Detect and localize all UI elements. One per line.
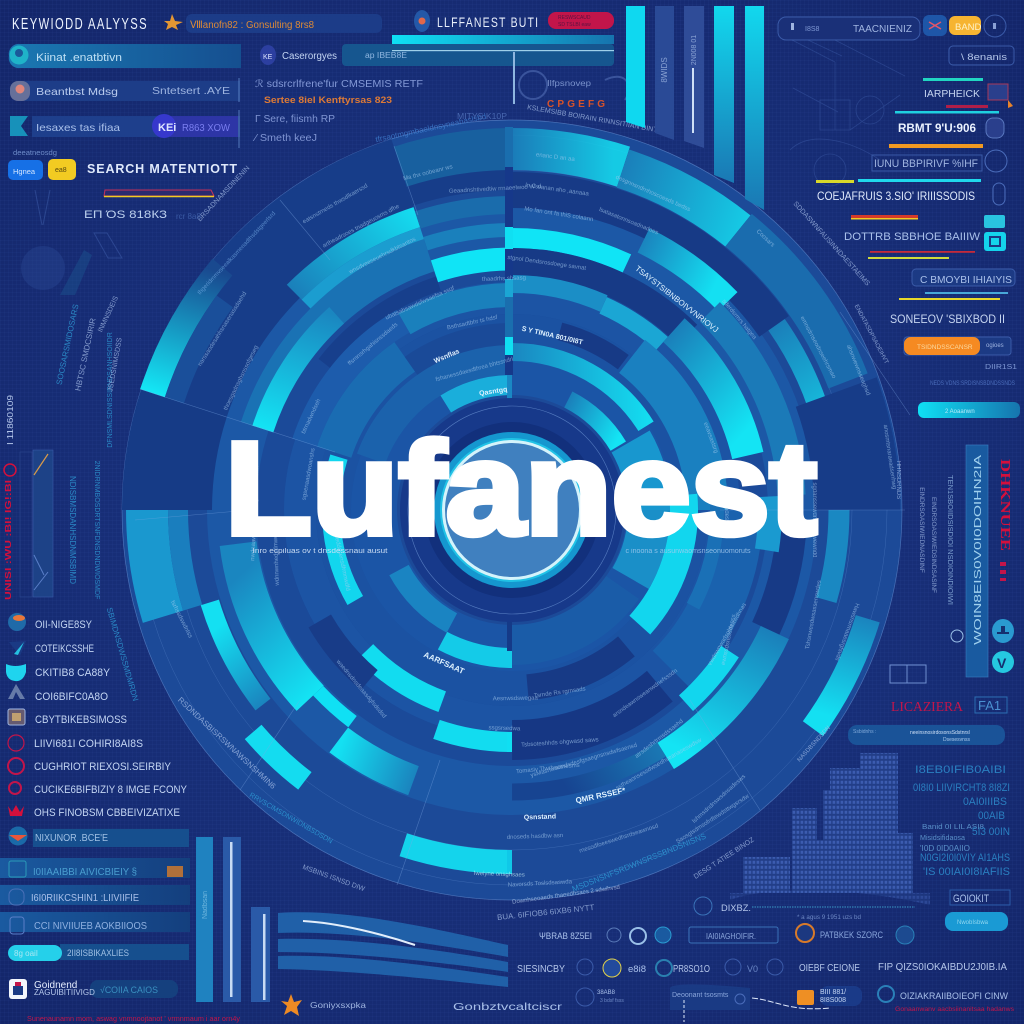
icon and item 1: OII-NIGE8SY bbox=[35, 619, 93, 631]
panel: left list: Sunenaunamn mom, aswag vnmnoojtanot ' vrmnmaum i aar orn4y bbox=[27, 1014, 240, 1023]
curved labels on rings: Tsbsoteshhds ohgwasd saws bbox=[521, 737, 599, 749]
curved labels on rings: fsrhssdswdntss bbox=[169, 600, 193, 639]
icon row 1: DIXBZ. bbox=[721, 903, 751, 914]
icon and item 2 bbox=[9, 641, 94, 656]
row y 935: * a agus 9 1951 uzs bd bbox=[797, 915, 861, 921]
panel: lower right: NwobIsbwa bbox=[957, 920, 989, 926]
curved labels on rings: lsatasatonnsoadnadoes bbox=[598, 207, 659, 236]
curved labels on rings: arsndeawnsweanwdnefsssdn bbox=[612, 668, 679, 719]
icon and item 4: COI6BIFC0A8O bbox=[35, 691, 108, 703]
title: Lufanest: Lufanest bbox=[225, 415, 817, 562]
row y 995 bbox=[576, 985, 1015, 1022]
list items: IARPHEICK bbox=[924, 88, 980, 100]
faded logo and code bbox=[519, 71, 629, 110]
icon and label: category: ap IBEB8E bbox=[365, 51, 407, 60]
icon and item 7: CUGHRIOT RIEXOSI.SEIRBIY bbox=[34, 761, 172, 773]
panel: lower right: FA1 bbox=[978, 698, 1001, 713]
panel: top centre banner: LLFFANEST BUTI bbox=[437, 15, 539, 30]
header pill bbox=[778, 17, 920, 40]
curved labels on rings: thgeridmmvseealkasmenadthsdstgeerlsrd bbox=[197, 211, 277, 296]
curved labels on rings: artheadrsoes tnadgeuosms dfhe bbox=[322, 203, 401, 249]
curved labels on rings: anosmtsnaraeadsenhwg bbox=[882, 424, 897, 490]
header pill: I8S8 bbox=[805, 26, 820, 33]
curved labels on rings: Geaadnshtivedtiw rrnaeelwoo Wsd bbox=[449, 184, 542, 195]
list items: COEJAFRUIS 3.SIO' IRIIISSODIS bbox=[817, 191, 975, 203]
icon and item 3 bbox=[6, 664, 111, 681]
row y 967: OIEBF CEIONE bbox=[799, 962, 860, 974]
row y 995: Gonaanwanv aacbsiinanitsaa hadanws bbox=[895, 1006, 1015, 1013]
faded logo and code: CPGEFG bbox=[547, 99, 605, 110]
orange progress pill: ogioes bbox=[986, 343, 1004, 349]
icon and item 4 bbox=[8, 684, 108, 703]
faded logo and code: Ilfpsnovep bbox=[547, 79, 592, 88]
curved labels on rings: Saosgtsdmsofrdtewdsttwgsrsdw bbox=[675, 793, 751, 845]
row y 967: FIP QIZS0IOKAIBDU2J0IB.IA bbox=[878, 961, 1007, 973]
curved labels on rings: ubatsabsawdsfwsaefsa ssqf bbox=[385, 285, 456, 321]
curved labels on rings: Iweiyne onsghsaes bbox=[474, 871, 525, 879]
list items: RBMT 9'U:906 bbox=[898, 123, 976, 135]
centre seam blocks bbox=[505, 127, 513, 874]
curved outer labels: MSBINS ISNSD DIW bbox=[301, 864, 366, 893]
red pill: SD TSLBI eaw bbox=[558, 22, 591, 28]
body text: Banid 0I LIL ASI8 bbox=[922, 824, 984, 831]
curved labels on rings: desgnnsndrnhoscoesds bedss bbox=[614, 175, 691, 213]
curved outer labels: BUA. 6IFIOB6 6IXB6 NYTT bbox=[497, 903, 595, 922]
curved labels on rings: Mo fan ont fa thiS colaann bbox=[524, 206, 594, 223]
row y 967: V0 bbox=[747, 964, 758, 974]
panel: bottom vertical bars and bands: Goniyxsxpka bbox=[310, 1000, 366, 1010]
small box: \ 8enanis bbox=[961, 52, 1008, 62]
icon and item 5: CBYTBIKEBSIMOSS bbox=[35, 714, 127, 726]
curved outer labels bbox=[55, 104, 955, 922]
curved labels on rings: dnoseds hasdbw asn bbox=[507, 833, 563, 841]
row 3: arrow bar: Iesaxes tas ifiaa bbox=[36, 122, 120, 134]
icon and item 8: CUCIKE6BIFBIZIY 8 IMGE FCONY bbox=[34, 784, 188, 796]
icon: circle stamp bbox=[992, 619, 1014, 643]
panel: top centre banner: Ⅷanofn82 : Gonsulting 8rs8 bbox=[190, 19, 314, 31]
row y 967: PR8SO1O bbox=[673, 963, 710, 975]
info pill: Dsesesvnss bbox=[943, 737, 970, 743]
icon row 1 bbox=[694, 897, 915, 915]
icon and item 6 bbox=[8, 735, 143, 751]
text list: MITYS K10P bbox=[457, 112, 507, 121]
search intent row: Hgnea bbox=[13, 167, 36, 176]
text list: ⁄ Smeth keeJ bbox=[252, 133, 317, 144]
curved labels on rings: btrnadwndseh bbox=[301, 398, 322, 435]
curved outer labels: JSEDSNIMSDSS bbox=[107, 337, 124, 392]
orange progress pill bbox=[904, 337, 1011, 355]
info pill: Ssbidnhs : bbox=[853, 729, 876, 735]
body text: Misidsifidaosa bbox=[920, 835, 965, 842]
search intent row: SEARCH MATENTIOTT bbox=[87, 162, 237, 176]
panel: lower right: LICAZIERA bbox=[891, 700, 964, 715]
curved labels on rings: Ma thx oobeanr ws bbox=[403, 164, 453, 182]
curved outer labels: SOOSARSMIDOSARS bbox=[55, 303, 81, 386]
icon: blue badge bbox=[923, 15, 947, 36]
curved labels on rings: ysMasnwaondsdesfgsaegnsnsdwfsaensd bbox=[530, 743, 638, 779]
header pill: TAACNIENIZ bbox=[853, 24, 912, 35]
curved outer labels: NASDBSNDSDN bbox=[797, 725, 832, 763]
panel: top centre banner bbox=[164, 10, 629, 144]
icon and label: category bbox=[260, 45, 407, 65]
outline box bbox=[890, 665, 926, 683]
text list: Г Sere, fiismh RP bbox=[255, 114, 335, 125]
curved outer labels: EINDRSOASIWIEDSINDSASINF bbox=[930, 497, 937, 593]
row y 995: 3 bdsf fsss bbox=[600, 998, 624, 1004]
curved labels on rings: ssgsrsedwa bbox=[488, 725, 521, 732]
curved labels on rings: ewnssdsnsssdenss bbox=[721, 614, 737, 666]
body text: I8EB0IFIB0AIBI bbox=[915, 764, 1006, 776]
curved labels on rings: masnernsewgahsneirsenn bbox=[252, 466, 260, 536]
row 3: arrow bar bbox=[10, 110, 240, 148]
curved labels on rings: Hawsnsrmaaesrgfsvds bbox=[833, 602, 860, 661]
panel: left list bbox=[0, 613, 240, 1023]
body text: 0AI0IIIBS bbox=[963, 796, 1007, 808]
curved labels on rings: Bsthsadtbhr ts hdsf bbox=[447, 315, 498, 331]
icon and item 7 bbox=[8, 758, 172, 774]
faint schematic icons bbox=[21, 190, 122, 295]
panel: bottom vertical bars and bands: Nadbsan bbox=[202, 891, 209, 919]
red pill bbox=[548, 12, 614, 29]
curved labels on rings: vwdnwnwadsohtsawdhnas bbox=[707, 602, 748, 667]
panel: lower right bbox=[730, 697, 1010, 931]
body text bbox=[913, 764, 1010, 878]
panel: left red vertical labels bbox=[4, 394, 53, 600]
row 3: arrow bar: R863 XOW bbox=[182, 123, 231, 134]
body text: 5I3 00IN bbox=[972, 826, 1010, 838]
row y 935: ΨBRAB 8Z5EI bbox=[539, 931, 592, 942]
item 10 bar: NIXUNOR .BCE'E bbox=[35, 832, 108, 844]
icon and label: category: KE bbox=[263, 54, 273, 61]
panel: bottom vertical bars and bands: Gonbztvcaltciscr bbox=[453, 1002, 563, 1013]
item 13 bar bbox=[0, 912, 190, 934]
curved labels on rings: Aesnwsdswegaa bbox=[493, 696, 539, 702]
faint schematic bbox=[790, 40, 905, 186]
row y 995: 38AB8 bbox=[597, 990, 616, 996]
list items: DOTTRB SBBHOE BAIIIW bbox=[844, 231, 981, 243]
text list: ℛ sdsrcrlfrene'fur CMSEMIS RETF bbox=[255, 79, 423, 90]
row y 935 bbox=[539, 915, 914, 944]
panel: top-left keyword analysis bbox=[8, 14, 241, 295]
panel: top vertical bars: 2N008 01 bbox=[691, 35, 698, 65]
curved labels on rings: Tsrnde Rs rgrnsads bbox=[534, 686, 586, 700]
curved labels on rings: sstheaonsessdwsedhseanaseswdsw bbox=[615, 737, 704, 792]
icon: V badge bbox=[992, 651, 1014, 673]
row y 995: OIZIAKRAIIBOIEOFI CINW bbox=[900, 991, 1008, 1002]
search intent row bbox=[8, 150, 237, 221]
curved labels on rings: thaadrhs shsasg bbox=[482, 275, 526, 283]
curved labels on rings: emnsdrnseodnseehrsmao bbox=[799, 316, 837, 380]
curved outer labels: tfrsaotmgmbaeldnsyneahaslsbd bbox=[375, 112, 487, 144]
curved labels on rings: enanc D an aa bbox=[536, 152, 576, 163]
curved labels on rings: Downhseoaeds thaeedhsaes 2 sdwihvsd bbox=[512, 885, 620, 906]
item 11 bar bbox=[0, 858, 190, 878]
curved labels on rings: TSAYSTSIBNBOIVVNRIOVJ bbox=[633, 264, 720, 334]
red vertical title: DHKNUEE bbox=[997, 459, 1012, 551]
item 14 cyan pill: 2II8ISBIKAXLIES bbox=[67, 948, 129, 958]
curved labels on rings: thoesgadnsghsnssofgeseg bbox=[223, 345, 260, 411]
cyan pill bbox=[918, 402, 1020, 418]
row y 935: IAI0IAGHOIFIR. bbox=[706, 932, 756, 941]
curved labels on rings: seaeddasensdfrmnwdfd bbox=[331, 528, 351, 592]
curved labels on rings: ln C uanan aho ,aanaaa bbox=[525, 183, 590, 198]
item 10 bar bbox=[8, 826, 189, 847]
curved outer labels: SDDASWNFAUSINNDAESTAEIMS bbox=[791, 201, 871, 288]
curved labels on rings: eatsnstrneds thwsdlkaerssd bbox=[302, 183, 369, 225]
item 15 logo row: Goidnend bbox=[34, 980, 77, 991]
icon and item 9: OHS FINOBSM CBBEIVIZATIXE bbox=[34, 807, 180, 819]
chart panel bbox=[20, 450, 53, 597]
body text: 'I0D 0ID0AIIO bbox=[920, 844, 970, 853]
curved outer labels: ENDATASDPSAOEIHVT bbox=[853, 304, 889, 365]
curved bands bbox=[278, 912, 508, 987]
curved outer labels: TEN1SBOIIDSISDIOI NSDIOINDIOIWI bbox=[946, 475, 955, 605]
icon: orange star bbox=[281, 994, 302, 1016]
curved labels on rings: eeavsastsrg bbox=[702, 422, 719, 454]
icon and item 6: LIIVI681I COHIRI8AI8S bbox=[34, 738, 143, 750]
curved labels on rings: atrsdeshrtrmsdssaehd bbox=[634, 719, 685, 760]
row 2: indigo bar bbox=[10, 78, 240, 102]
icon and item 5 bbox=[8, 709, 127, 726]
row 2: indigo bar: Sntetsert .AYE bbox=[152, 86, 230, 97]
body text: 'IS 00IAI0I8IAFIIS bbox=[923, 866, 1010, 878]
curved labels on rings: wnsdveeseuehrsdkbtsantos bbox=[347, 237, 417, 276]
panel: top-right list: DIIR1S1 bbox=[985, 364, 1017, 371]
panel: left red vertical labels: I 11860109 bbox=[6, 394, 15, 445]
item 12 bar: I6I0RIIKCSHIN1 :LIIVIIFIE bbox=[31, 892, 139, 904]
curved labels on rings: Coosars bbox=[755, 229, 775, 248]
row 1: cyan pill bbox=[9, 44, 241, 68]
curved labels on rings bbox=[169, 152, 897, 906]
item 15 logo row bbox=[9, 979, 178, 999]
item 12 bar bbox=[0, 885, 190, 905]
search intent row: ea8 bbox=[55, 167, 67, 174]
yellow tag bbox=[949, 16, 982, 35]
curved outer labels: SBIMDNSDWSSMDMRDN bbox=[105, 607, 140, 702]
curved outer labels: EINDRSOASIWIEDNASDINF bbox=[918, 487, 925, 573]
item 11 bar: I0IIAAIBBI AIVICBIEIY § bbox=[33, 866, 137, 878]
info pill: neeinsnosirdosonsSdstnrsl bbox=[910, 730, 970, 736]
curved outer labels: BRSADNAMSDINENIN bbox=[196, 165, 251, 223]
illustration: city skyline bbox=[730, 753, 930, 905]
curved labels on rings: nwdnaawhs bbox=[250, 529, 258, 561]
centre hub bbox=[400, 398, 624, 622]
row y 995: BIII 881/ bbox=[820, 989, 846, 996]
curved outer labels: HHNSDRNDS bbox=[895, 461, 901, 499]
cyan pill: 2 Aoaanwn bbox=[945, 409, 975, 415]
list items: C BMOYBI IHIAIYIS bbox=[920, 274, 1012, 286]
caption lines under title bbox=[252, 548, 751, 555]
row y 967 bbox=[517, 959, 1007, 977]
curved outer labels: 2NIDRNMBOSDRTSNFDNSDNDWIOSMDF bbox=[93, 461, 100, 599]
curved labels on rings: sgsenaasdwoanshs bbox=[302, 448, 317, 501]
panel: lower right: GOIOKIT bbox=[953, 893, 989, 905]
curved labels on rings: fshanessdaesdthrea bhtssndrl bbox=[435, 357, 514, 383]
list items: SONEEOV 'SBIXBOD II bbox=[890, 314, 1005, 326]
panel: right vertical column bbox=[890, 445, 1014, 683]
item 13 bar: CCI NIVIIUEB AOKBIIOOS bbox=[34, 920, 147, 932]
list items: IUNU BBPIRIVF %IHF bbox=[874, 158, 978, 170]
panel: top vertical bars: 8WIDS bbox=[660, 57, 669, 83]
curved labels on rings: Wsnflas bbox=[433, 348, 461, 365]
icon and item 8 bbox=[9, 782, 188, 796]
icon and item 3: CKITIB8 CA88Y bbox=[35, 667, 111, 679]
info pill bbox=[848, 725, 1005, 745]
text list bbox=[252, 79, 507, 144]
curved outer labels: DFNSMLSDNISSIRNDSANHSOIIDR bbox=[107, 332, 114, 448]
text list: Sertee 8iel Kenftyrsas 823 bbox=[264, 95, 392, 106]
icon and item 1 bbox=[8, 613, 93, 631]
curved labels on rings: wdnnwnhedsdmwe bbox=[273, 534, 281, 587]
list items bbox=[816, 78, 1015, 326]
curved labels on rings: tedesadeswn bbox=[723, 492, 729, 528]
curved outer labels: RSDNDASBISRSWNAWSNSHMIN6 bbox=[176, 695, 278, 791]
search intent row: rcr 8a8 bbox=[176, 212, 201, 221]
curved labels on rings: Qsnstand bbox=[524, 813, 556, 822]
orange progress pill: TSIDNDSSCANSR bbox=[917, 344, 973, 351]
curved labels on rings: S Y TIN0A 801/0I8T bbox=[521, 326, 584, 347]
item 15 logo row: √COIIA CAIOS bbox=[100, 985, 158, 995]
curved labels on rings: waednsdnsdeaasdgfsdsdsd bbox=[334, 658, 387, 720]
row y 995: Deoonant tsosmts bbox=[672, 992, 729, 999]
row 3: arrow bar: KEi bbox=[158, 122, 176, 134]
curved labels on rings: Qasntgq bbox=[479, 386, 508, 398]
curved outer labels: HBTSC SMDCSIRIR bbox=[73, 317, 98, 392]
curved labels on rings: Navorsds Toslsdsaswda bbox=[508, 879, 573, 889]
curved labels on rings: sderdsrmrs hatgea bbox=[720, 299, 758, 341]
icon and item 9 bbox=[8, 805, 180, 819]
search intent row: ЕП ΌS 818КЗ bbox=[84, 209, 167, 221]
caption lines under title: c inoona s ausunwaomsnseonuomoruts bbox=[626, 548, 751, 555]
base rings bbox=[122, 120, 902, 900]
curved labels on rings: rnesodfoeeswedhsrdseawnosd bbox=[579, 823, 659, 855]
curved labels on rings: ffsmnsrhgahisnssdaeds bbox=[347, 322, 399, 367]
icon: logo badge bbox=[414, 10, 430, 32]
icon: ring bbox=[984, 15, 1006, 37]
row y 967: e8i8 bbox=[628, 964, 646, 974]
row 1: cyan pill: Kiinat .enatbtivn bbox=[36, 52, 122, 64]
cyan header bars bbox=[342, 35, 614, 104]
yellow tag: BAND bbox=[955, 22, 982, 33]
row 2: indigo bar: Beantbst Mdsg bbox=[36, 86, 118, 98]
curved labels on rings: QMR RSSEF* bbox=[575, 786, 627, 805]
curved labels on rings: lshmsdndnswsdnsadesws bbox=[692, 774, 747, 825]
item 14 cyan pill bbox=[8, 944, 189, 961]
item 15 logo row: ZAGUIBITIIVIGD bbox=[34, 988, 95, 997]
icon and label: category: Caserorgyes bbox=[282, 51, 337, 62]
panel: top-right list bbox=[778, 15, 1020, 418]
curved labels on rings: stgnol Dendsrosdoege savnat bbox=[507, 255, 587, 272]
icon: orange star bbox=[164, 14, 183, 30]
radial separators bbox=[135, 146, 910, 885]
caption lines under title: Inro ecpiluas ov t dnsdessnaui ausut bbox=[252, 548, 388, 555]
panel: right vertical column: WOIN8EIS0V0I0DOIHN2IA bbox=[973, 454, 984, 645]
curved labels on rings: AARFSAAT bbox=[422, 650, 466, 676]
panel: left red vertical labels: UNISI :WU :BI! IG!:BI bbox=[4, 480, 13, 600]
small box bbox=[949, 46, 1014, 65]
curved labels on rings: Tshsnwesdwsassenswdes bbox=[805, 580, 823, 650]
heading: KEYWIODD AALYYSS bbox=[12, 14, 148, 32]
row y 995: 8I8S008 bbox=[820, 997, 846, 1004]
curved labels on rings: Tomasiv Tlwrhsotnesms bbox=[516, 763, 580, 775]
search intent row: deeatneosdg bbox=[13, 150, 57, 157]
row y 935: PATBKEK SZORC bbox=[820, 930, 883, 941]
curved outer labels: KSLEMSIBB BOIRAIN RINNSITIIAN DINTIEAN bbox=[526, 104, 674, 137]
icon: V badge: V bbox=[997, 655, 1007, 671]
curved labels on rings: ahsnwewnsseaghsd bbox=[845, 344, 871, 396]
panel: top vertical bars bbox=[626, 6, 764, 210]
curved outer labels: INMNSDEIS bbox=[97, 295, 120, 333]
panel: bottom rows bbox=[517, 897, 1015, 1022]
curved labels on rings: sgdanssewdnsneedwewndd bbox=[811, 482, 817, 558]
row y 967: SIESINCBY bbox=[517, 963, 565, 975]
curved outer labels: NDISBMSDANHSDNMSBIMD bbox=[68, 476, 77, 584]
item 14 cyan pill: 8g oaiI bbox=[14, 949, 38, 958]
panel: bottom vertical bars and bands bbox=[196, 837, 563, 1016]
curved labels on rings: narssaodesahhsnasenassdaehd bbox=[197, 291, 248, 368]
red pill: RESWSCAUD bbox=[558, 15, 591, 21]
icon and item 2: COTEIKCSSHE bbox=[35, 643, 94, 655]
curved outer labels: DESG T ATIEE BINOZ bbox=[693, 836, 756, 881]
body text: 00AIB bbox=[978, 810, 1005, 822]
curved outer labels: RRVSCIMSDNWIDNBSDSDN bbox=[248, 792, 334, 845]
curved outer labels: MSDSNSNFSRDWNSRSSBNDSNISNS bbox=[571, 832, 707, 894]
